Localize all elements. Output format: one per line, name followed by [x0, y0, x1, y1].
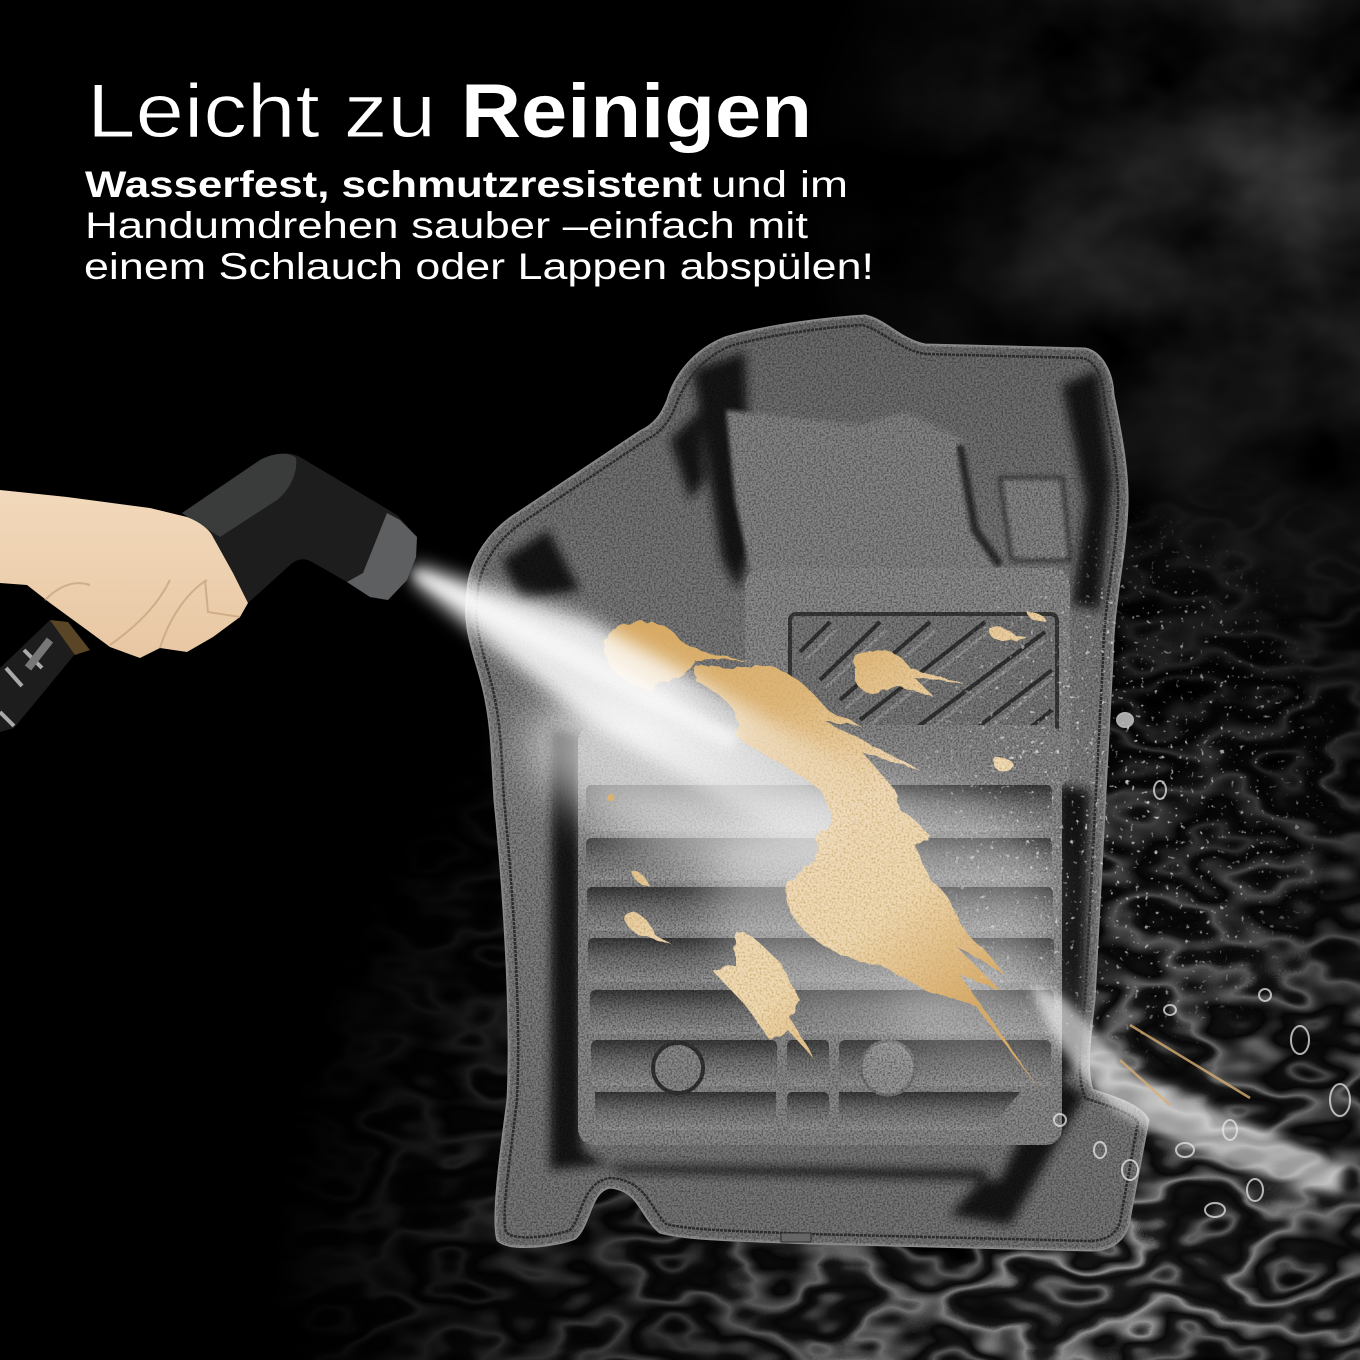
footwell ribs — [586, 785, 1054, 1130]
mat tag — [781, 1233, 811, 1242]
footwell base — [578, 725, 1062, 1145]
floor mat — [460, 310, 1160, 1260]
mat body — [467, 316, 1148, 1250]
description text: Wasserfest, schmutzresistent — [85, 164, 702, 205]
description text: einem Schlauch oder Lappen abspülen! — [84, 246, 874, 287]
water splash — [1030, 713, 1350, 1217]
mat shadows — [502, 352, 1112, 1225]
water haze — [506, 660, 1070, 1060]
hand — [0, 490, 248, 658]
spray gun — [0, 454, 417, 732]
gun nozzle collar — [347, 513, 417, 600]
hose — [0, 620, 90, 732]
spray jet — [414, 564, 860, 860]
pedal wall — [726, 410, 1000, 580]
stains — [604, 612, 1045, 1090]
water ripples — [322, 506, 1360, 1360]
leather grain — [460, 310, 1160, 1260]
gun top face — [182, 454, 296, 537]
description text: und im — [711, 164, 848, 205]
heel pad panel — [788, 612, 1059, 732]
water speckle — [902, 512, 1342, 1063]
heel pad — [745, 568, 1070, 788]
description text: Handumdrehen sauber –einfach mit — [85, 205, 809, 246]
background smoke — [890, 0, 1360, 598]
description text — [84, 164, 874, 287]
headline: Reinigen — [461, 69, 812, 154]
gun body — [182, 454, 417, 603]
headline: Leicht zu — [87, 69, 436, 154]
retention clips — [653, 1043, 703, 1093]
mat stitching — [476, 325, 1138, 1241]
